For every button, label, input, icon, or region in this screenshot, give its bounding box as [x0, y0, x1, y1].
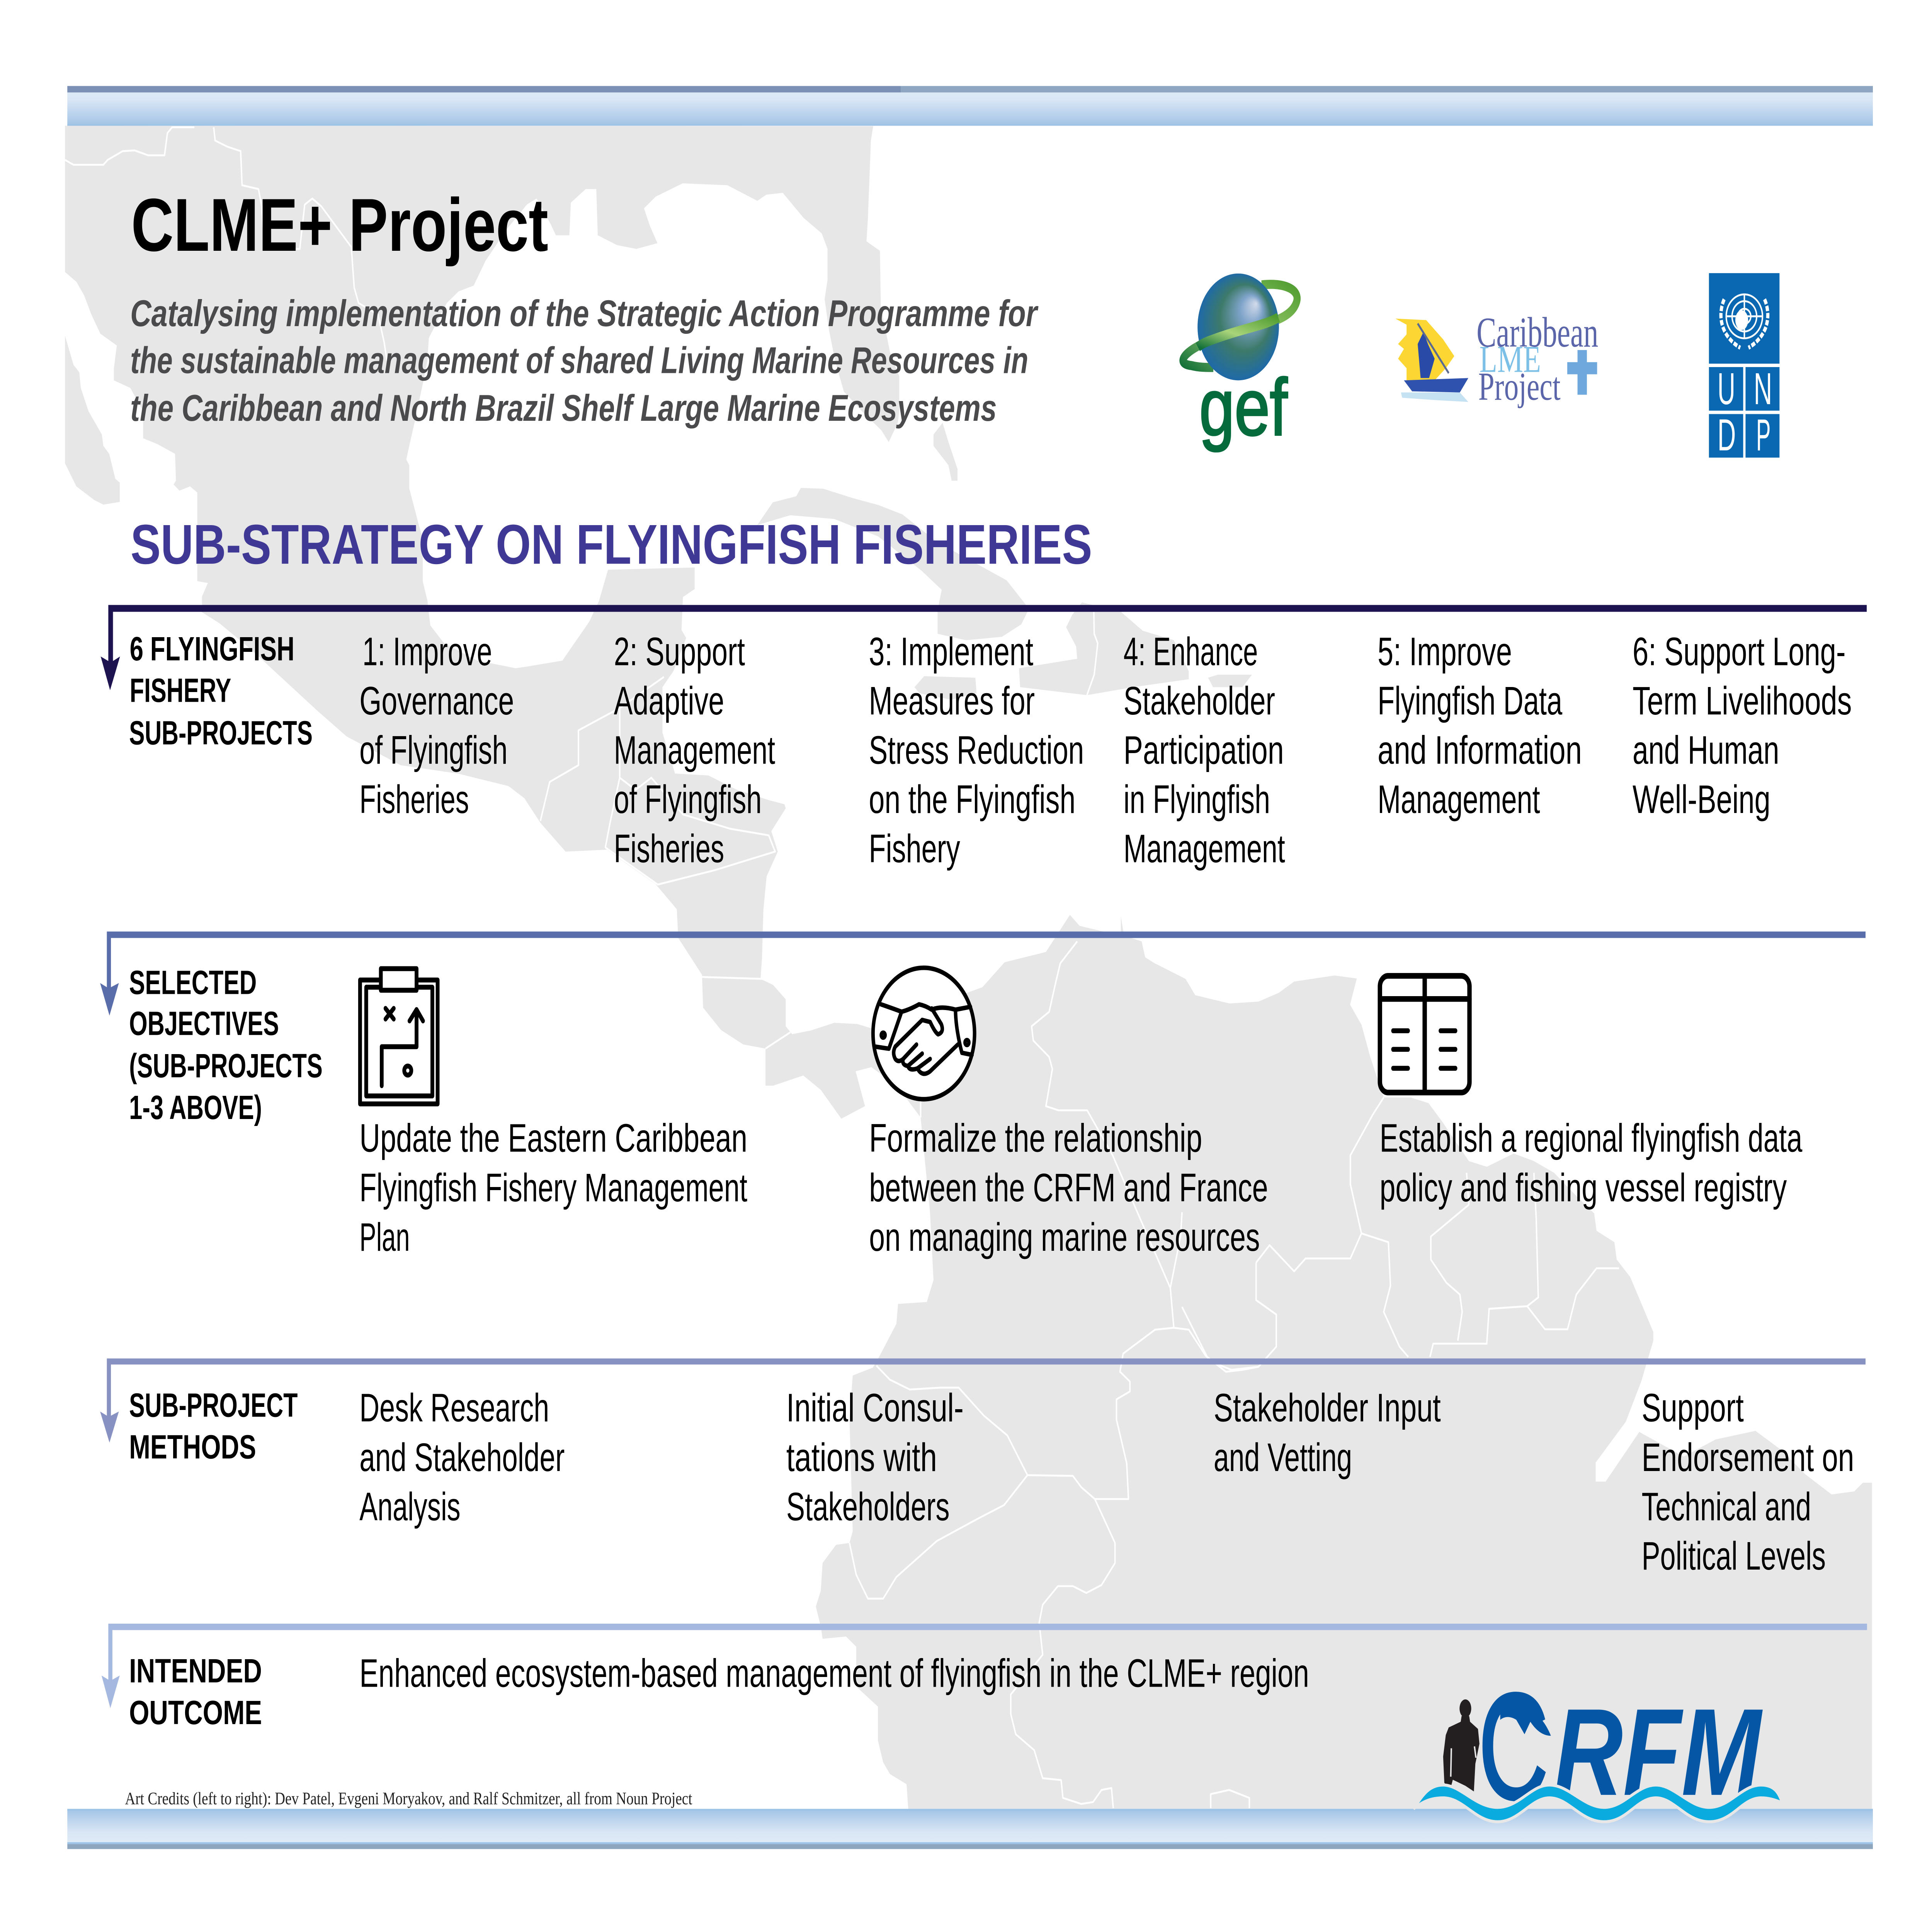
heading: sub-strategy: SUB-STRATEGY ON FLYINGFISH FISHERIES: [131, 514, 1092, 576]
logo: GEF: [1183, 274, 1297, 452]
logo: CRFM: RFM: [1554, 1683, 1764, 1821]
sub-project 1: Fisheries: [359, 777, 469, 821]
sub-project 6: 6: Support Long-: [1633, 630, 1846, 674]
sub-project 6: [1633, 630, 1852, 821]
row: sub-project methods: [100, 1359, 1866, 1578]
sub-project 4: Stakeholder: [1124, 679, 1275, 723]
method 1: Analysis: [359, 1485, 461, 1529]
row label: SUB-PROJECT: [129, 1386, 298, 1424]
sub-project 2: Fisheries: [614, 827, 724, 871]
sub-project 1: of Flyingfish: [359, 728, 508, 772]
sub-project 4: [1124, 630, 1285, 871]
subtitle: the Caribbean and North Brazil Shelf Large Marine Ecosystems: [130, 388, 997, 429]
icon: data table: [1380, 976, 1469, 1092]
objective 3: [1379, 1116, 1803, 1210]
logo: CRFM: C: [1478, 1662, 1549, 1831]
method 3: Stakeholder Input: [1214, 1386, 1441, 1430]
logo: UNDP: N: [1754, 364, 1772, 414]
sub-project 2: Adaptive: [614, 679, 724, 723]
method 4: Political Levels: [1641, 1534, 1826, 1578]
method 4: Endorsement on: [1641, 1435, 1854, 1480]
logo: Caribbean LME Project: LME: [1480, 338, 1541, 380]
sub-project 4: 4: Enhance: [1124, 630, 1258, 674]
rule and arrow: [101, 605, 1867, 690]
rule and arrow: [100, 1359, 1866, 1442]
sub-project 2: Management: [614, 728, 775, 772]
sub-project 2: [614, 630, 775, 871]
logo: Caribbean LME Project: Project: [1478, 364, 1561, 408]
sub-project 3: 3: Implement: [869, 630, 1033, 674]
objective 1: Flyingfish Fishery Management: [359, 1166, 747, 1210]
sub-project 3: Fishery: [869, 827, 960, 871]
row label: INTENDED: [129, 1651, 262, 1690]
sub-project 3: Stress Reduction: [869, 728, 1084, 772]
sub-project 3: [869, 630, 1084, 871]
sub-project 5: and Information: [1378, 728, 1582, 772]
sub-project 6: and Human: [1633, 728, 1779, 772]
method 2: [786, 1386, 964, 1529]
bottom banner bar: [67, 1809, 1873, 1849]
row label: [129, 963, 323, 1126]
objective 1: Update the Eastern Caribbean: [359, 1116, 747, 1160]
row label: [129, 1651, 262, 1731]
logo: UNDP: D: [1718, 410, 1736, 460]
sub-project 3: Measures for: [869, 679, 1035, 723]
sub-project 2: of Flyingfish: [614, 777, 762, 821]
rule and arrow: [102, 1624, 1867, 1708]
logo: Caribbean LME Project: [1395, 310, 1598, 408]
row label: OUTCOME: [129, 1693, 262, 1731]
sub-project 5: 5: Improve: [1378, 630, 1512, 674]
sub-project 1: [359, 630, 514, 821]
objective 1: Plan: [359, 1215, 410, 1260]
row label: (SUB-PROJECTS: [129, 1047, 323, 1085]
sub-project 1: Governance: [359, 679, 514, 723]
title: CLME+ Project: [131, 183, 548, 267]
objective 2: [869, 1116, 1268, 1260]
objective 3: policy and fishing vessel registry: [1379, 1166, 1787, 1210]
logo: UNDP: U: [1718, 364, 1735, 414]
sub-project 1: 1: Improve: [362, 630, 492, 674]
objective 1: [359, 1116, 747, 1260]
method 1: and Stakeholder: [359, 1435, 565, 1480]
logo: UNDP: P: [1756, 410, 1771, 460]
row label: FISHERY: [130, 671, 231, 709]
objective 2: between the CRFM and France: [869, 1166, 1268, 1210]
row: selected objectives: [100, 932, 1866, 1260]
outcome text: Enhanced ecosystem-based management of flyingfish in the CLME+ region: [359, 1651, 1309, 1696]
logo: UNDP: [1709, 273, 1779, 460]
objective 2: Formalize the relationship: [869, 1116, 1202, 1160]
method 1: Desk Research: [359, 1386, 549, 1430]
sub-project 6: Well-Being: [1633, 777, 1770, 821]
sub-project 2: 2: Support: [614, 630, 745, 674]
method 1: [359, 1386, 565, 1529]
row label: METHODS: [129, 1428, 256, 1466]
row label: SELECTED: [129, 963, 257, 1002]
sub-project 5: [1378, 630, 1582, 821]
row label: [129, 629, 313, 752]
subtitle: [130, 293, 1039, 429]
method 3: [1214, 1386, 1441, 1480]
icon: clipboard with plan: [360, 969, 438, 1104]
method 2: tations with: [786, 1435, 937, 1480]
row: intended outcome: [102, 1624, 1867, 1731]
sub-project 5: Flyingfish Data: [1378, 679, 1563, 723]
sub-project 4: Management: [1124, 827, 1285, 871]
top banner bar: [67, 86, 1873, 126]
sub-project 3: on the Flyingfish: [869, 777, 1075, 821]
objective 3: Establish a regional flyingfish data: [1379, 1116, 1803, 1160]
icon: handshake: [873, 968, 975, 1099]
subtitle: Catalysing implementation of the Strategic Action Programme for: [130, 293, 1039, 334]
objective 2: on managing marine resources: [869, 1215, 1260, 1260]
method 4: Support: [1641, 1386, 1744, 1430]
row label: OBJECTIVES: [129, 1004, 279, 1042]
row label: SUB-PROJECTS: [129, 714, 313, 752]
logo: Caribbean LME Project: Caribbean: [1476, 310, 1598, 356]
rule and arrow: [100, 932, 1866, 1015]
method 2: Initial Consul-: [786, 1386, 964, 1430]
method 4: [1641, 1386, 1854, 1578]
row label: 6 FLYINGFISH: [130, 629, 294, 668]
method 3: and Vetting: [1214, 1435, 1352, 1480]
logo: CRFM: [1413, 1662, 1782, 1831]
sub-project 5: Management: [1378, 777, 1540, 821]
method 2: Stakeholders: [786, 1485, 950, 1529]
art credits: Art Credits (left to right): Dev Patel, Evgeni Moryakov, and Ralf Schmitzer, all from Noun Project: [125, 1789, 692, 1808]
method 4: Technical and: [1641, 1485, 1811, 1529]
logo: GEF: gef: [1199, 363, 1287, 452]
row label: [129, 1386, 298, 1466]
subtitle: the sustainable management of shared Living Marine Resources in: [130, 340, 1028, 381]
row: 6 flyingfish fishery sub-projects: [101, 605, 1867, 871]
sub-project 4: Participation: [1124, 728, 1284, 772]
sub-project 4: in Flyingfish: [1124, 777, 1270, 821]
sub-project 6: Term Livelihoods: [1633, 679, 1852, 723]
row label: 1-3 ABOVE): [129, 1088, 262, 1126]
